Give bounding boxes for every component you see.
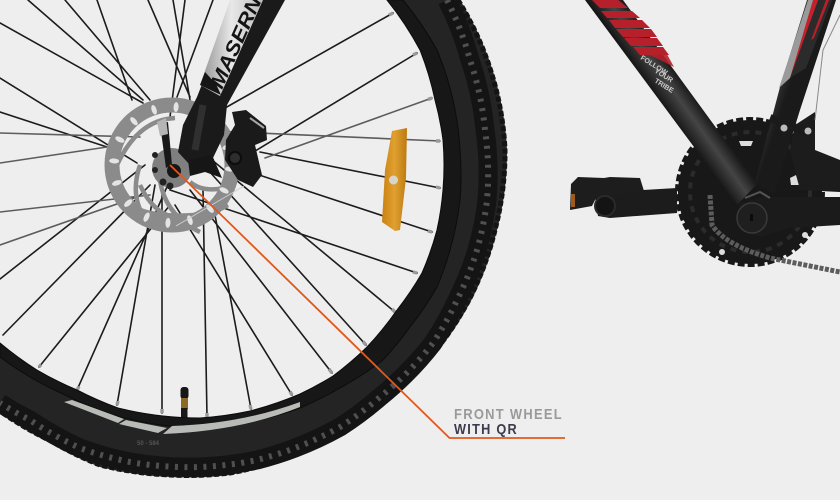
valve stem (180, 387, 188, 420)
front derailleur (790, 112, 840, 192)
front fork with decal: MASERN (206, 0, 267, 92)
front tyre (0, 0, 507, 477)
tyre edge knobs (0, 0, 505, 475)
tube slogan: FOLLOW (639, 55, 669, 77)
red chevron decal (592, 0, 674, 67)
tyre body (0, 0, 507, 477)
callout label (454, 406, 563, 438)
tread lugs (0, 0, 488, 467)
right crank arm and bottom bracket (737, 192, 840, 237)
tyre sidewall lettering: 50 - 584 (137, 441, 160, 447)
crankset chainring (677, 112, 840, 265)
seat tube (755, 0, 840, 194)
wheel spokes (0, 0, 440, 417)
reflector (382, 128, 407, 231)
brake caliper (176, 110, 267, 226)
tread band (0, 0, 488, 467)
quick release lever (160, 122, 172, 168)
tube slogan (639, 55, 675, 95)
label line 1: FRONT WHEEL (454, 406, 563, 423)
rim reflective stripes (64, 400, 300, 434)
left crank arm and pedal (570, 177, 677, 218)
callout leader line (170, 165, 565, 438)
front derailleur clamp (770, 118, 812, 134)
brake disc rotor (109, 102, 235, 232)
down tube (585, 0, 757, 205)
tube slogan: TRIBE (653, 78, 675, 95)
chain (710, 195, 840, 272)
rim (0, 0, 461, 428)
front fork with decal (157, 0, 285, 178)
chainring cutouts (739, 141, 810, 185)
tube slogan: YOUR (653, 68, 674, 84)
label line 2: WITH QR (454, 421, 518, 438)
